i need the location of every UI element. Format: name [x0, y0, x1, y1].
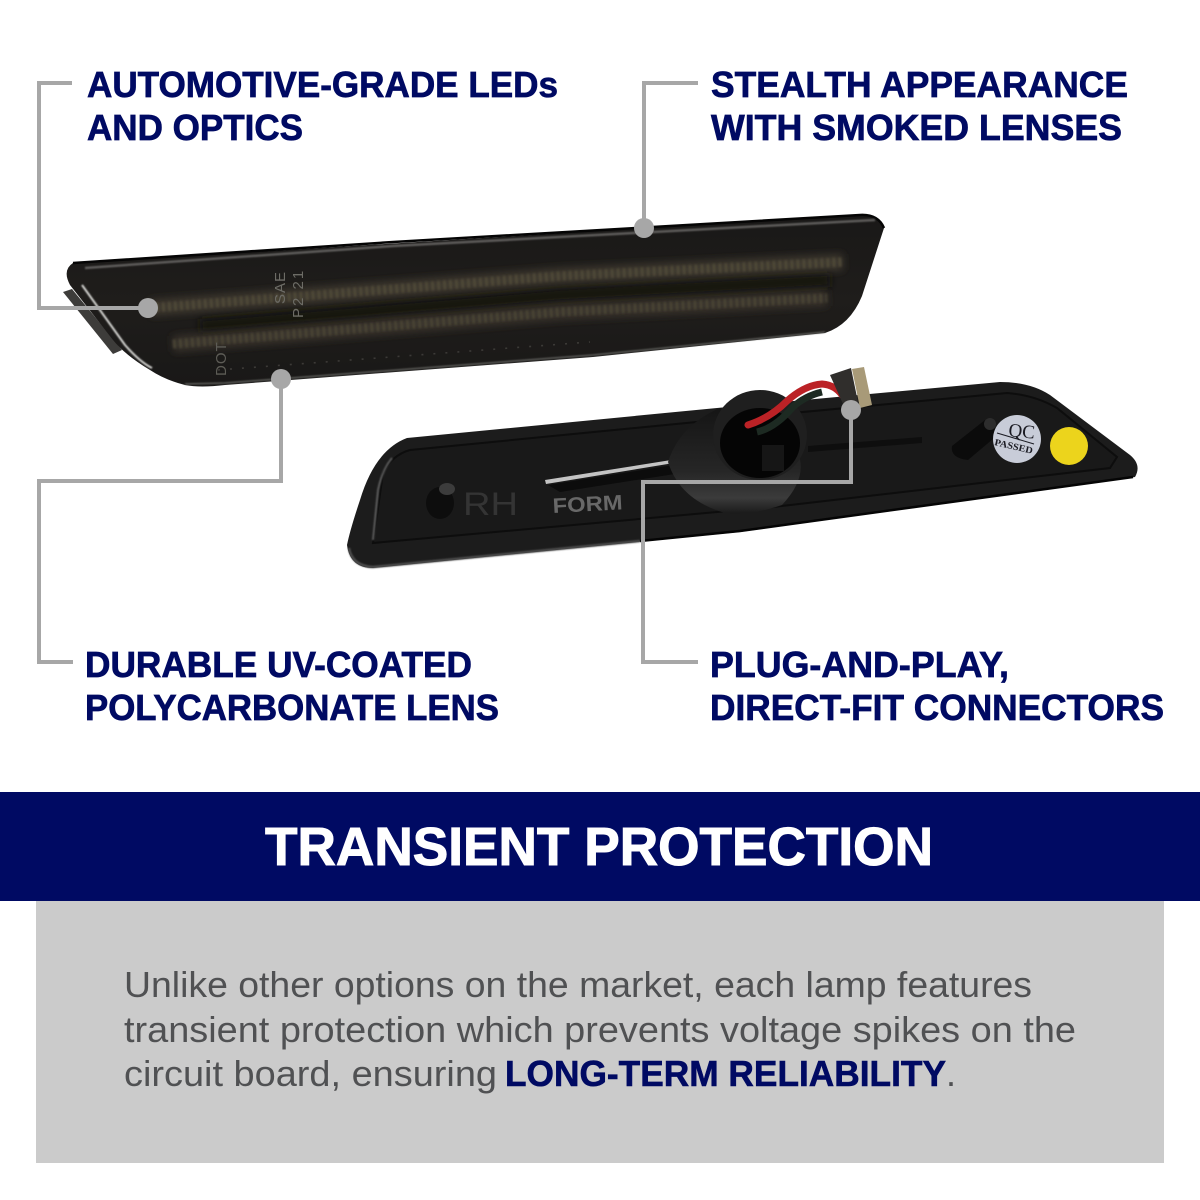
- yellow sticker: [1050, 427, 1088, 465]
- leader line: [39, 83, 148, 308]
- body text: Unlike other options on the market, each lamp features: [124, 964, 1032, 1005]
- callout: plug-and-play: [643, 400, 1164, 728]
- leader line: [39, 379, 281, 662]
- lamp top highlight: [85, 220, 875, 268]
- wire green: [757, 392, 822, 432]
- lamp left bevel: [82, 285, 152, 368]
- LED strip glow upper: [150, 262, 843, 308]
- right channel: [808, 437, 922, 452]
- lens dotted row: [218, 342, 590, 370]
- molded text SAE: SAE: [272, 271, 289, 304]
- molded text P2 21: P2 21: [290, 269, 307, 318]
- leader line: [643, 410, 851, 662]
- callout text: [85, 644, 499, 728]
- wire red: [748, 384, 842, 425]
- product: smoked lens marker lamp, front: [63, 215, 884, 386]
- product: marker lamp, rear with connector: [347, 367, 1138, 568]
- molded text FORM: FORM: [552, 491, 623, 518]
- body text: circuit board, ensuring: [124, 1053, 497, 1094]
- socket hole: [720, 408, 800, 478]
- lamp top black edge: [73, 215, 884, 263]
- housing lower edge right: [640, 477, 1133, 541]
- lamp side tabs: [63, 289, 122, 354]
- leader dot: [841, 400, 861, 420]
- lamp bottom edge: [185, 332, 825, 384]
- callout text: DURABLE UV-COATED: [85, 644, 472, 685]
- callout text: AND OPTICS: [87, 107, 303, 148]
- leader dot: [271, 369, 291, 389]
- callout text: [710, 644, 1164, 728]
- callout text: [711, 64, 1128, 148]
- rod highlight: [545, 441, 716, 492]
- leader dot: [138, 298, 158, 318]
- callout text: POLYCARBONATE LENS: [85, 687, 499, 728]
- lamp lens body: [67, 215, 884, 386]
- callout text: WITH SMOKED LENSES: [711, 107, 1122, 148]
- panel: description box: [36, 901, 1164, 1163]
- socket collar: [713, 390, 807, 480]
- LED dots upper: [150, 262, 843, 308]
- leader line: [644, 83, 698, 228]
- box background: [36, 901, 1164, 1163]
- LED dots lower: [173, 298, 827, 344]
- callout text: DIRECT-FIT CONNECTORS: [710, 687, 1164, 728]
- housing lower edge left: [349, 541, 640, 567]
- body text: transient protection which prevents voltage spikes on the: [124, 1009, 1076, 1050]
- body text: [124, 964, 1076, 1094]
- callout text: STEALTH APPEARANCE: [711, 64, 1128, 105]
- callout: stealth appearance: [634, 64, 1128, 238]
- banner: [0, 792, 1200, 901]
- socket inner detail: [762, 445, 784, 471]
- body text: .: [946, 1053, 956, 1094]
- QC sticker: PASSED: [993, 438, 1034, 457]
- peg left: [426, 483, 455, 519]
- molded text DOT: DOT: [213, 341, 230, 376]
- leader dot: [634, 218, 654, 238]
- dark band between strips: [200, 280, 830, 326]
- callout text: AUTOMOTIVE-GRADE LEDs: [87, 64, 558, 105]
- banner title: TRANSIENT PROTECTION: [265, 817, 933, 877]
- socket cone: [668, 408, 801, 514]
- left ridge highlight: [373, 458, 392, 540]
- callout: durable lens: [39, 369, 499, 728]
- connector: [830, 367, 872, 408]
- callout: automotive-grade LEDs: [39, 64, 558, 318]
- QC sticker: [993, 415, 1041, 463]
- molded text RH: RH: [463, 486, 518, 522]
- QC sticker: QC: [1007, 420, 1036, 444]
- housing body: [347, 382, 1138, 568]
- LED strip glow lower: [173, 298, 827, 344]
- callout text: PLUG-AND-PLAY,: [710, 644, 1009, 685]
- peg right: [952, 418, 1000, 460]
- housing inner ridge: [373, 393, 1117, 543]
- callout text: [87, 64, 558, 148]
- body text: LONG-TERM RELIABILITY: [505, 1053, 946, 1094]
